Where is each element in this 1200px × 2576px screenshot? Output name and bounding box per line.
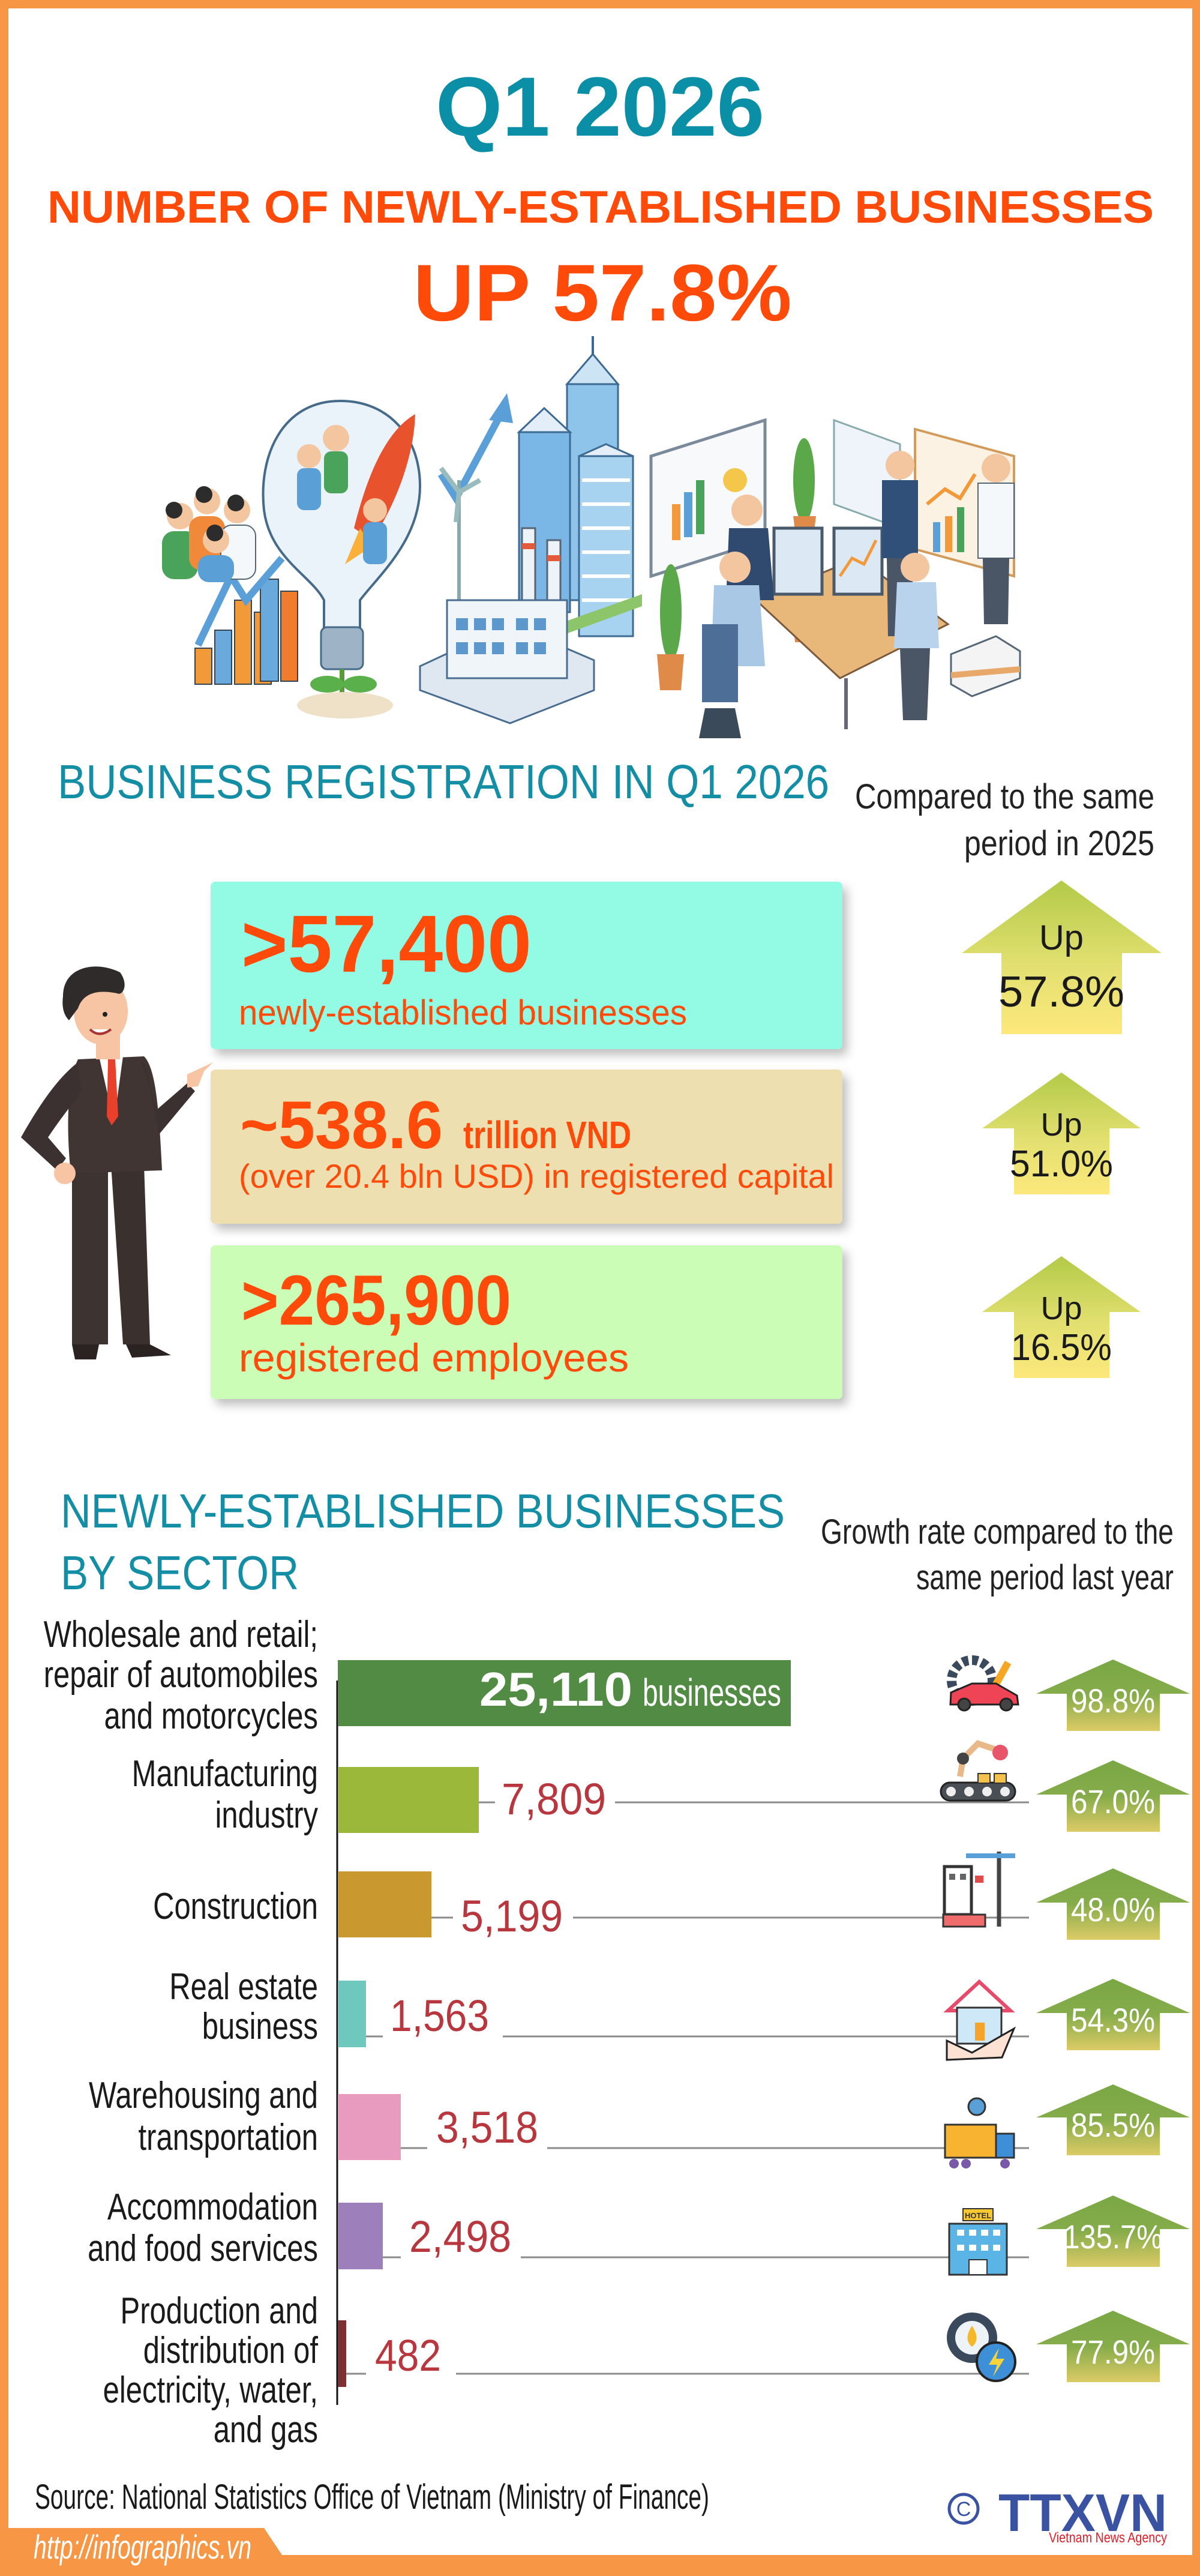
arrow: up 16.5%: 16.5% (1011, 1327, 1112, 1368)
panel: registered capital: ~538.6 (240, 1088, 443, 1163)
panel: registered employees (211, 1245, 842, 1399)
footer band (0, 2528, 1200, 2576)
labels: and food services (88, 2227, 318, 2269)
labels: distribution of (143, 2329, 318, 2371)
logo: TTXVN: Vietnam News Agency (1049, 2530, 1167, 2546)
labels: Wholesale and retail; (44, 1613, 318, 1655)
bar chart: sectors: 3,518 (436, 2102, 538, 2152)
arrow: up 57.8%: Up (1039, 918, 1084, 957)
icon: hotel: HOTEL (965, 2211, 991, 2220)
values: 25,110 (479, 1663, 632, 1716)
bars (338, 1660, 791, 1726)
icon: bar chart with arrow (195, 558, 298, 684)
icon: construction crane (943, 1852, 1015, 1927)
arrows: sector growth (1036, 1660, 1190, 2382)
text: compared to same period: period in 2025 (964, 824, 1154, 863)
arrow: up 51.0%: 51.0% (1010, 1143, 1113, 1185)
text: compared to same period (855, 777, 1154, 863)
icon: hotel (949, 2209, 1007, 2275)
heading: businesses by sector: BY SECTOR (61, 1546, 299, 1599)
bar chart: sectors: 7,809 (502, 1774, 606, 1824)
icon: growth arrow (441, 408, 504, 498)
icon: real estate house (947, 1982, 1014, 2060)
panel: new businesses: >57,400 (241, 898, 532, 989)
bar chart: sectors: 1,563 (390, 1991, 489, 2041)
heading: businesses by sector (61, 1484, 785, 1599)
icon: car repair (950, 1660, 1018, 1711)
labels: and gas (214, 2408, 318, 2450)
logo: TTXVN: TTXVN (998, 2483, 1167, 2542)
labels: Real estate (169, 1965, 318, 2007)
arrow: up 16.5% (982, 1256, 1141, 1378)
logo: TTXVN: C (956, 2498, 971, 2521)
panel: registered employees: >265,900 (241, 1261, 511, 1340)
labels: repair of automobiles (44, 1653, 318, 1695)
text: source: Source: National Statistics Office of Vietnam (Ministry of Finance) (35, 2478, 709, 2517)
arrow: up 51.0% (982, 1073, 1141, 1194)
bar chart: sectors: 482 (375, 2331, 441, 2380)
arrow: up 16.5%: Up (1040, 1290, 1082, 1326)
title: NUMBER OF NEWLY-ESTABLISHED BUSINESSES (47, 182, 1154, 233)
arrows: sector growth: 135.7% (1063, 2218, 1163, 2256)
panel: registered capital: trillion VND (463, 1113, 631, 1157)
labels: Warehousing and (89, 2074, 318, 2116)
illustration: businessman pointing (21, 966, 213, 1359)
labels: Construction (153, 1885, 318, 1927)
arrow: up 57.8% (962, 880, 1162, 1034)
bar chart: sectors: 5,199 (461, 1891, 563, 1941)
labels: electricity, water, (103, 2368, 318, 2410)
icon: factory robot (941, 1744, 1015, 1801)
labels: Manufacturing (132, 1752, 318, 1794)
arrow: up 57.8%: 57.8% (998, 968, 1124, 1016)
values (479, 1663, 781, 1716)
icon: energy gear (947, 2313, 1015, 2381)
title: Q1 2026 (436, 59, 764, 154)
arrows: sector growth: 85.5% (1071, 2106, 1155, 2144)
icon: city towers and factory (420, 336, 642, 723)
footer band: http://infographics.vn (34, 2528, 251, 2566)
illustration: business growth scene (162, 336, 1020, 738)
icon: group of people (162, 486, 256, 582)
panel: new businesses (211, 882, 842, 1049)
labels: Accommodation (107, 2185, 318, 2227)
text: growth rate note (821, 1512, 1174, 1597)
panel: registered capital (211, 1070, 842, 1224)
panel: registered capital: (over 20.4 bln USD) in registered capital (239, 1157, 834, 1195)
bar chart: sectors (44, 1613, 1029, 2450)
panel: new businesses: newly-established businesses (239, 993, 687, 1032)
arrow: up 51.0%: Up (1040, 1107, 1082, 1143)
heading: businesses by sector: NEWLY-ESTABLISHED BUSINESSES (61, 1484, 785, 1538)
values: businesses (643, 1671, 781, 1714)
labels (44, 1613, 318, 2450)
heading: business registration: BUSINESS REGISTRATION IN Q1 2026 (58, 755, 829, 808)
labels: Production and (121, 2289, 318, 2331)
arrows: sector growth: 77.9% (1071, 2333, 1155, 2371)
labels: transportation (139, 2116, 318, 2158)
labels: business (202, 2005, 318, 2047)
labels: and motorcycles (104, 1694, 318, 1736)
text: compared to same period: Compared to the same (855, 777, 1154, 816)
bar chart: sectors: 2,498 (409, 2212, 511, 2262)
title (47, 59, 1154, 338)
icon: delivery truck (945, 2098, 1014, 2168)
title: UP 57.8% (413, 248, 792, 338)
arrows: sector growth: 48.0% (1071, 1891, 1155, 1928)
arrows: sector growth: 98.8% (1071, 1682, 1155, 1720)
panel: registered employees: registered employees (239, 1335, 629, 1380)
arrows: sector growth: 54.3% (1071, 2001, 1155, 2039)
arrows: sector growth: 67.0% (1071, 1783, 1155, 1820)
labels: industry (215, 1793, 318, 1835)
icon: office team at work (651, 420, 1020, 738)
icon: light bulb with rocket (263, 401, 420, 718)
